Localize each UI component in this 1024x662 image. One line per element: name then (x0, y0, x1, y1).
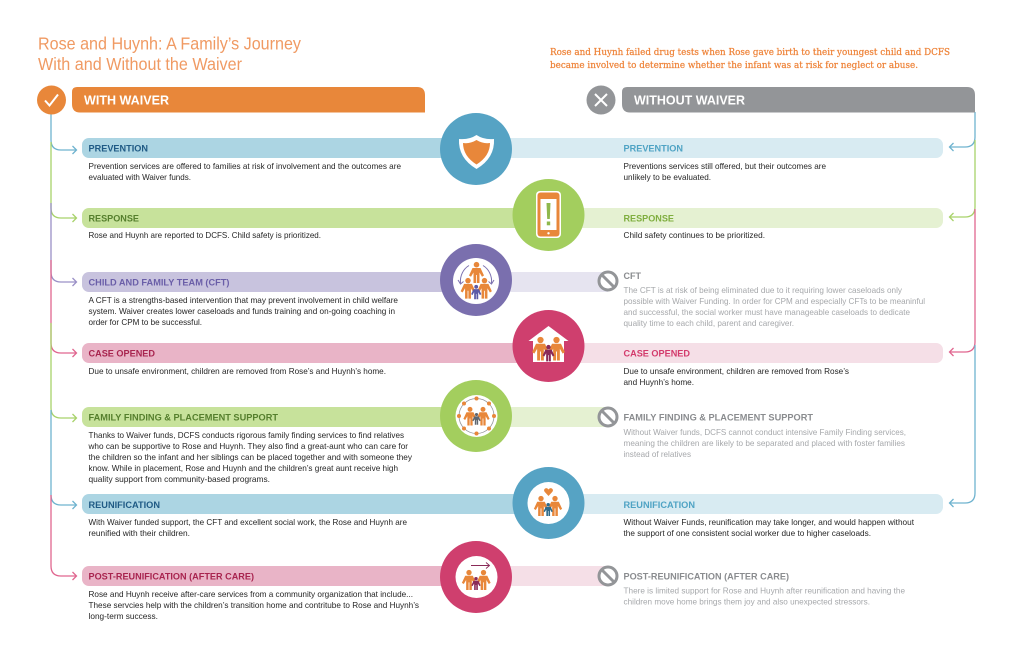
panel: family finding and placement support: know. While in placement, Rose and Huynh and the children’s great aunt receive high (88, 464, 398, 473)
panel: family finding and placement support: quality support from community-based programs. (88, 475, 270, 484)
panel: case opened: Due to unsafe environment, children are removed from Rose’s and Huynh’s home. (88, 367, 386, 376)
panel: case opened: CASE OPENED (88, 348, 155, 358)
panel: post-reunification: Rose and Huynh receive after-care services from a community organization that include... (88, 590, 413, 599)
panel: family finding and placement support: Without Waiver funds, DCFS cannot conduct intensive Family Finding services, (624, 428, 906, 437)
title: With and Without the Waiver (38, 54, 242, 74)
panel: child and family team: The CFT is at risk of being eliminated due to it requiring lower caseloads only (624, 286, 903, 295)
with waiver header (37, 86, 425, 114)
panel: family finding and placement support: who can be supportive to Rose and Huynh. They also find a great-aunt who can care for (87, 442, 408, 451)
panel: reunification: With Waiver funded support, the CFT and excellent social work, the Rose and Huynh are (88, 518, 407, 527)
panel: prevention (82, 113, 943, 185)
intro text (550, 48, 950, 71)
with waiver header: WITH WAIVER (84, 94, 169, 108)
panel: child and family team (82, 244, 925, 328)
icon: no symbol for post-reunification (599, 567, 617, 585)
panel: reunification (82, 467, 943, 539)
panel: child and family team: quality time to each child, parent and caregiver. (624, 319, 794, 328)
panel: reunification: Without Waiver Funds, reunification may take longer, and would happen without (624, 518, 915, 527)
panel: family finding and placement support: meaning the children are likely to be separated and placed with foster families (624, 439, 905, 448)
panel: response: Child safety continues to be prioritized. (624, 231, 765, 240)
panel: family finding and placement support: Thanks to Waiver funds, DCFS conducts rigorous family finding services to find relatives (88, 431, 404, 440)
panel: family finding and placement support: the children so the infant and her siblings can be placed together and with someone they (88, 453, 413, 462)
panel: child and family team: order for CPM to be successful. (88, 318, 202, 327)
intro text: became involved to determine whether the infant was at risk for neglect or abuse. (550, 61, 918, 71)
panel: post-reunification: These servcies help with the children’s transition home and contritube to Rose and Huynh’s (88, 601, 419, 610)
without waiver header: WITHOUT WAIVER (634, 94, 745, 108)
panel: family finding and placement support: FAMILY FINDING & PLACEMENT SUPPORT (88, 412, 279, 422)
panel: family finding and placement support: FAMILY FINDING & PLACEMENT SUPPORT (624, 412, 814, 422)
panel: prevention: unlikely to be evaluated. (624, 173, 711, 182)
panel: reunification: REUNIFICATION (624, 500, 695, 510)
panel: case opened: and Huynh’s home. (624, 378, 694, 387)
panel: prevention: PREVENTION (624, 144, 683, 154)
panel: case opened (82, 310, 943, 387)
panel: family finding and placement support (82, 380, 906, 484)
panel: child and family team: CHILD AND FAMILY TEAM (CFT) (88, 278, 230, 288)
panel: prevention: PREVENTION (88, 144, 148, 154)
panel: response: Rose and Huynh are reported to DCFS. Child safety is prioritized. (88, 231, 321, 240)
right connector lines (950, 112, 975, 507)
panel: reunification: reunified with their children. (88, 529, 190, 538)
icon: no symbol for CFT (599, 272, 617, 290)
panel: child and family team: possible with Waiver Funding. In order for CPM and especially CFTs to be meaninful (624, 297, 925, 306)
without waiver header (586, 86, 975, 114)
panel: response (82, 179, 943, 251)
panel: prevention: evaluated with Waiver funds. (88, 173, 191, 182)
left connector lines (51, 114, 76, 580)
panel: post-reunification: long-term success. (88, 612, 158, 621)
panel: post-reunification: POST-REUNIFICATION (AFTER CARE) (88, 572, 254, 582)
panel: family finding and placement support: instead of relatives (624, 450, 691, 459)
panel: reunification: REUNIFICATION (88, 500, 160, 510)
panel: response: RESPONSE (88, 214, 139, 224)
panel: case opened: Due to unsafe environment, children are removed from Rose’s (624, 367, 849, 376)
panel: case opened: CASE OPENED (624, 348, 690, 358)
panel: prevention: Prevention services are offered to families at risk of involvement and the outcomes are (88, 162, 401, 171)
title: Rose and Huynh: A Family’s Journey (38, 34, 301, 54)
panel: child and family team: and successful, the social worker must have manageable caseloads to dedicate (624, 308, 910, 317)
intro text: Rose and Huynh failed drug tests when Rose gave birth to their youngest child and DCFS (550, 48, 950, 58)
icon: no symbol for family finding (599, 408, 617, 426)
panel: reunification: the support of one consistent social worker due to higher caseloads. (624, 529, 871, 538)
panel: response: RESPONSE (624, 214, 674, 224)
panel: post-reunification: POST-REUNIFICATION (AFTER CARE) (624, 572, 789, 582)
panel: post-reunification: There is limited support for Rose and Huynh after reunification and having the (624, 586, 905, 596)
panel: child and family team: system. Waiver creates lower caseloads and funds training and on-going coaching in (88, 307, 395, 316)
panel: post-reunification: children move home brings them joy and also unexpected stressors. (624, 598, 870, 606)
title (38, 34, 301, 74)
panel: child and family team: CFT (624, 271, 642, 281)
panel: post-reunification (82, 541, 905, 621)
panel: child and family team: A CFT is a strengths-based intervention that may prevent involvement in child welfare (88, 296, 398, 305)
panel: prevention: Preventions services still offered, but their outcomes are (624, 162, 826, 171)
